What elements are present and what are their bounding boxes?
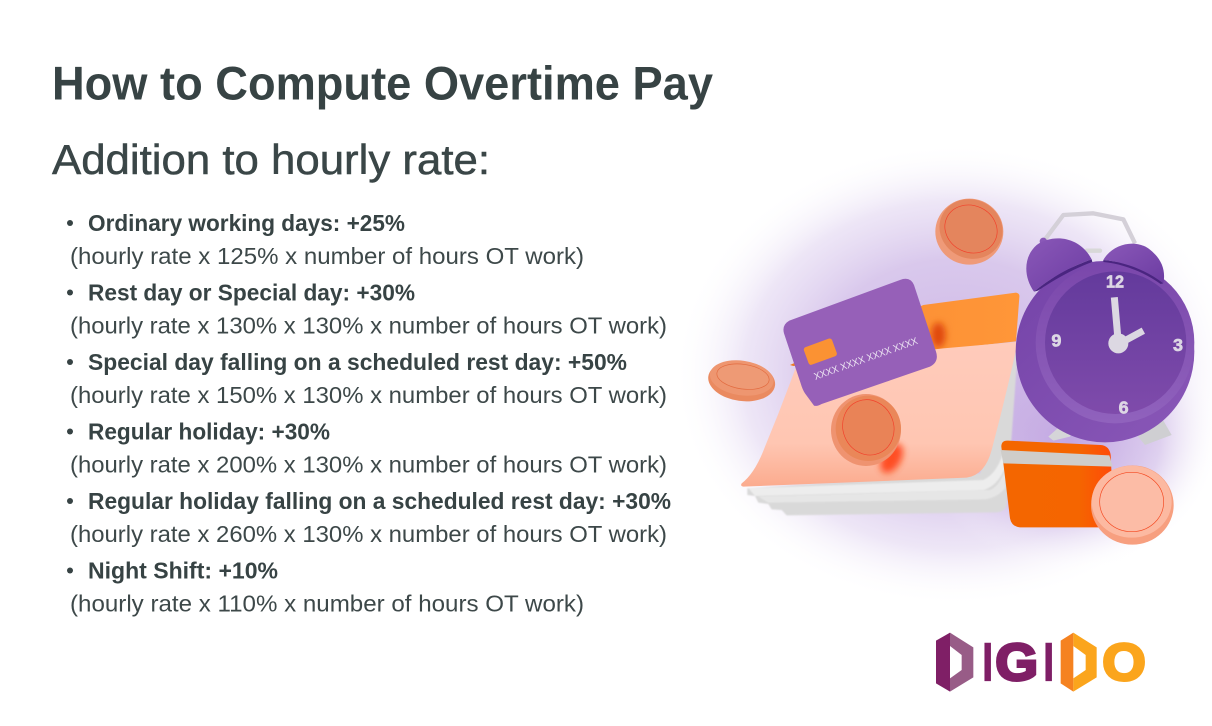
item: special day on rest day: Special day falling on a scheduled rest day: +50% (88, 349, 627, 375)
calendar page (741, 342, 1017, 487)
clock numbers: 9 (1051, 331, 1061, 351)
logo letters IGI (982, 633, 1054, 693)
coin: top (930, 189, 1012, 269)
item: night shift: Night Shift: +10% (88, 558, 278, 584)
clock body (1016, 261, 1194, 442)
clock numbers: 12 (1106, 271, 1124, 291)
item: ordinary working days: (hourly rate x 125% x number of hours OT work) (70, 243, 584, 269)
item: regular holiday: (hourly rate x 200% x 130% x number of hours OT work) (70, 452, 667, 478)
item: ordinary working days (67, 210, 584, 269)
subtitle: Addition to hourly rate: (52, 136, 490, 183)
item: regular holiday on rest day: Regular holiday falling on a scheduled rest day: +30% (88, 488, 671, 514)
clock face (1045, 271, 1186, 414)
credit card: XXXX XXXX XXXX XXXX (813, 336, 920, 383)
item: regular holiday: Regular holiday: +30% (88, 418, 330, 444)
background glow (673, 143, 1212, 607)
item: night shift: (hourly rate x 110% x number of hours OT work) (70, 590, 584, 616)
item: regular holiday (67, 418, 667, 478)
alarm clock (1016, 213, 1194, 445)
clock bells (1026, 238, 1092, 292)
item: regular holiday on rest day: (hourly rate x 260% x 130% x number of hours OT work) (70, 521, 667, 547)
calendar lower sheets (747, 343, 1018, 515)
item: rest day or special day: (hourly rate x 130% x 130% x number of hours OT work) (70, 312, 667, 338)
credit card (783, 279, 937, 406)
item: special day on rest day: (hourly rate x 150% x 130% x number of hours OT work) (70, 382, 667, 408)
clock numbers: 3 (1173, 335, 1183, 355)
item: rest day or special day: Rest day or Special day: +30% (88, 280, 415, 306)
clock handle (1043, 213, 1135, 243)
item: special day on rest day (67, 349, 667, 408)
wallet (1001, 441, 1113, 527)
logo letter D purple (936, 633, 973, 692)
item: ordinary working days: Ordinary working days: +25% (88, 210, 405, 236)
coin: bottom right (1091, 465, 1174, 545)
clock numbers (1051, 271, 1183, 417)
logo letter D orange (1061, 633, 1097, 692)
list of overtime rates (67, 210, 671, 616)
clock numbers: 6 (1119, 397, 1129, 417)
coin: left (706, 356, 778, 405)
logo letters IGI: I (982, 634, 993, 693)
item: rest day or special day (67, 280, 667, 338)
illustration: calendar, clock, card, coins (673, 143, 1212, 607)
clock hands (1114, 297, 1143, 343)
logo letters IGI: G (995, 633, 1038, 691)
title: How to Compute Overtime Pay (52, 56, 713, 110)
item: regular holiday on rest day (67, 488, 671, 547)
logo letters IGI: I (1043, 634, 1054, 693)
logo: DIGIDO (936, 633, 1146, 693)
item: night shift (67, 558, 584, 616)
coin: centre (826, 386, 911, 477)
logo letter O: O (1102, 633, 1146, 691)
clock feet (1048, 417, 1078, 441)
calendar (741, 293, 1019, 515)
